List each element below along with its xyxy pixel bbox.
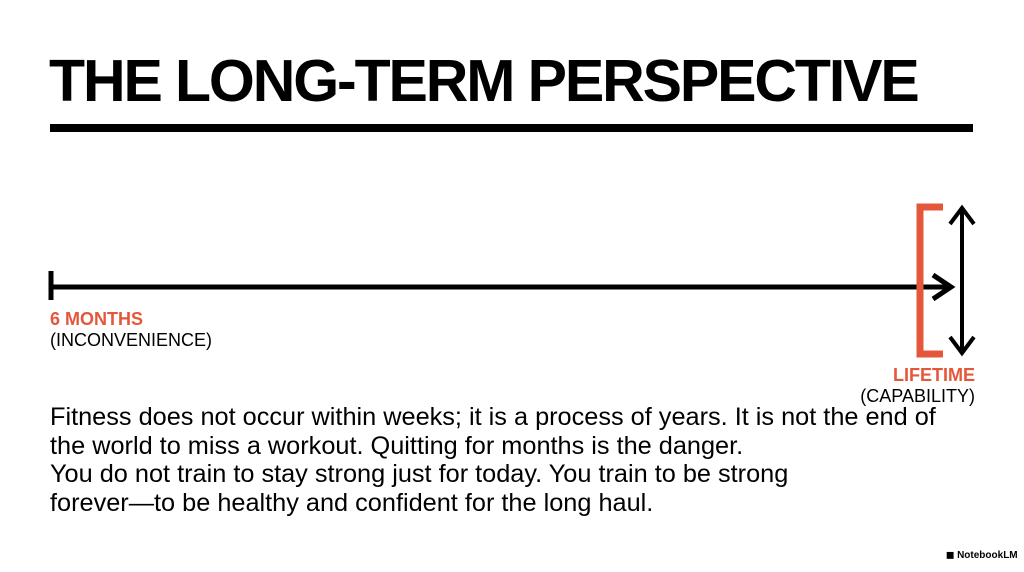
label: lifetime: (CAPABILITY) (860, 386, 975, 406)
label: 6 months (50, 309, 212, 350)
label: lifetime (860, 365, 975, 406)
label: 6 months: (INCONVENIENCE) (50, 330, 212, 350)
label: lifetime: LIFETIME (893, 365, 975, 385)
body text: the world to miss a workout. Quitting for months is the danger. (50, 432, 743, 460)
logo: ◼ NotebookLM (946, 550, 1018, 561)
label: 6 months: 6 MONTHS (50, 309, 143, 329)
title: THE LONG-TERM PERSPECTIVE (49, 48, 918, 114)
body text: forever—to be healthy and confident for the long haul. (50, 488, 653, 516)
capability vertical arrow (950, 208, 974, 353)
body text (50, 403, 936, 516)
title underline (50, 124, 973, 132)
body text: You do not train to stay strong just for today. You train to be strong (50, 460, 788, 488)
body text: Fitness does not occur within weeks; it is a process of years. It is not the end of (50, 403, 936, 431)
lifetime bracket (920, 207, 943, 354)
timeline arrow (51, 271, 951, 300)
